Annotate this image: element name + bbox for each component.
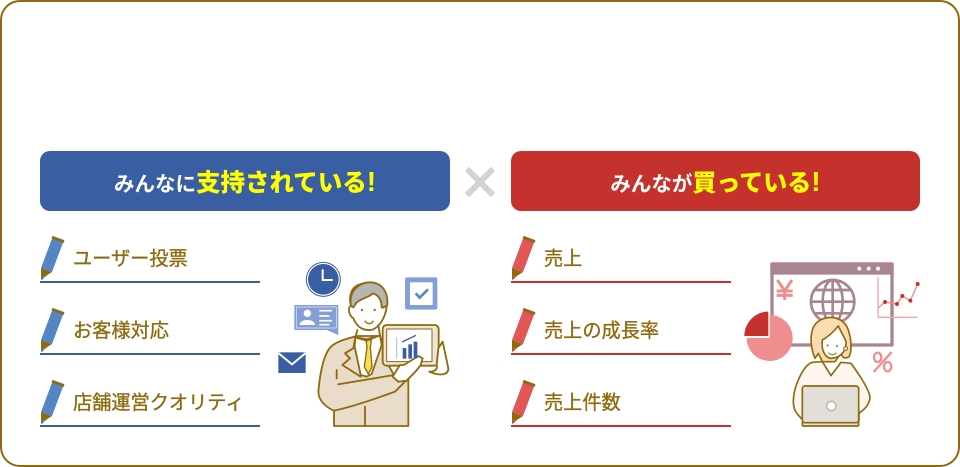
header: right — [511, 151, 920, 211]
person: face — [361, 309, 376, 324]
icon: profile card — [294, 305, 338, 335]
browser window — [770, 262, 894, 345]
item: sales: 売上 — [544, 249, 582, 270]
laptop logo — [827, 401, 836, 411]
item: customer service — [40, 305, 260, 355]
item: sales — [511, 233, 731, 283]
icon: envelope — [278, 352, 306, 373]
item: user votes — [40, 233, 260, 283]
item: sales growth — [511, 305, 731, 355]
item: number of sales: 売上件数 — [544, 393, 621, 414]
header: left: みんなに支持されている! — [114, 166, 376, 197]
person — [793, 317, 870, 426]
percent sign — [874, 352, 892, 372]
pie chart — [744, 312, 793, 361]
item: number of sales — [511, 377, 731, 427]
line chart — [878, 277, 920, 317]
item: sales growth: 売上の成長率 — [544, 321, 659, 342]
face — [827, 344, 838, 355]
item: store quality — [40, 377, 260, 427]
header: right: みんなが買っている! — [610, 166, 821, 197]
multiply sign — [465, 167, 495, 197]
header: left — [40, 151, 450, 211]
item: store quality: 店舗運営クオリティ — [73, 393, 245, 414]
person: body — [318, 282, 448, 426]
icon: clock — [306, 262, 340, 296]
icon: checkbox — [405, 277, 437, 310]
icon: globe — [811, 280, 854, 323]
illustration: woman with laptop — [744, 262, 920, 427]
item: user votes: ユーザー投票 — [73, 249, 188, 270]
tablet chart — [397, 335, 417, 359]
illustration: businessman with tablet — [278, 262, 450, 427]
item: customer service: お客様対応 — [73, 321, 169, 342]
icon: yen — [777, 280, 793, 300]
